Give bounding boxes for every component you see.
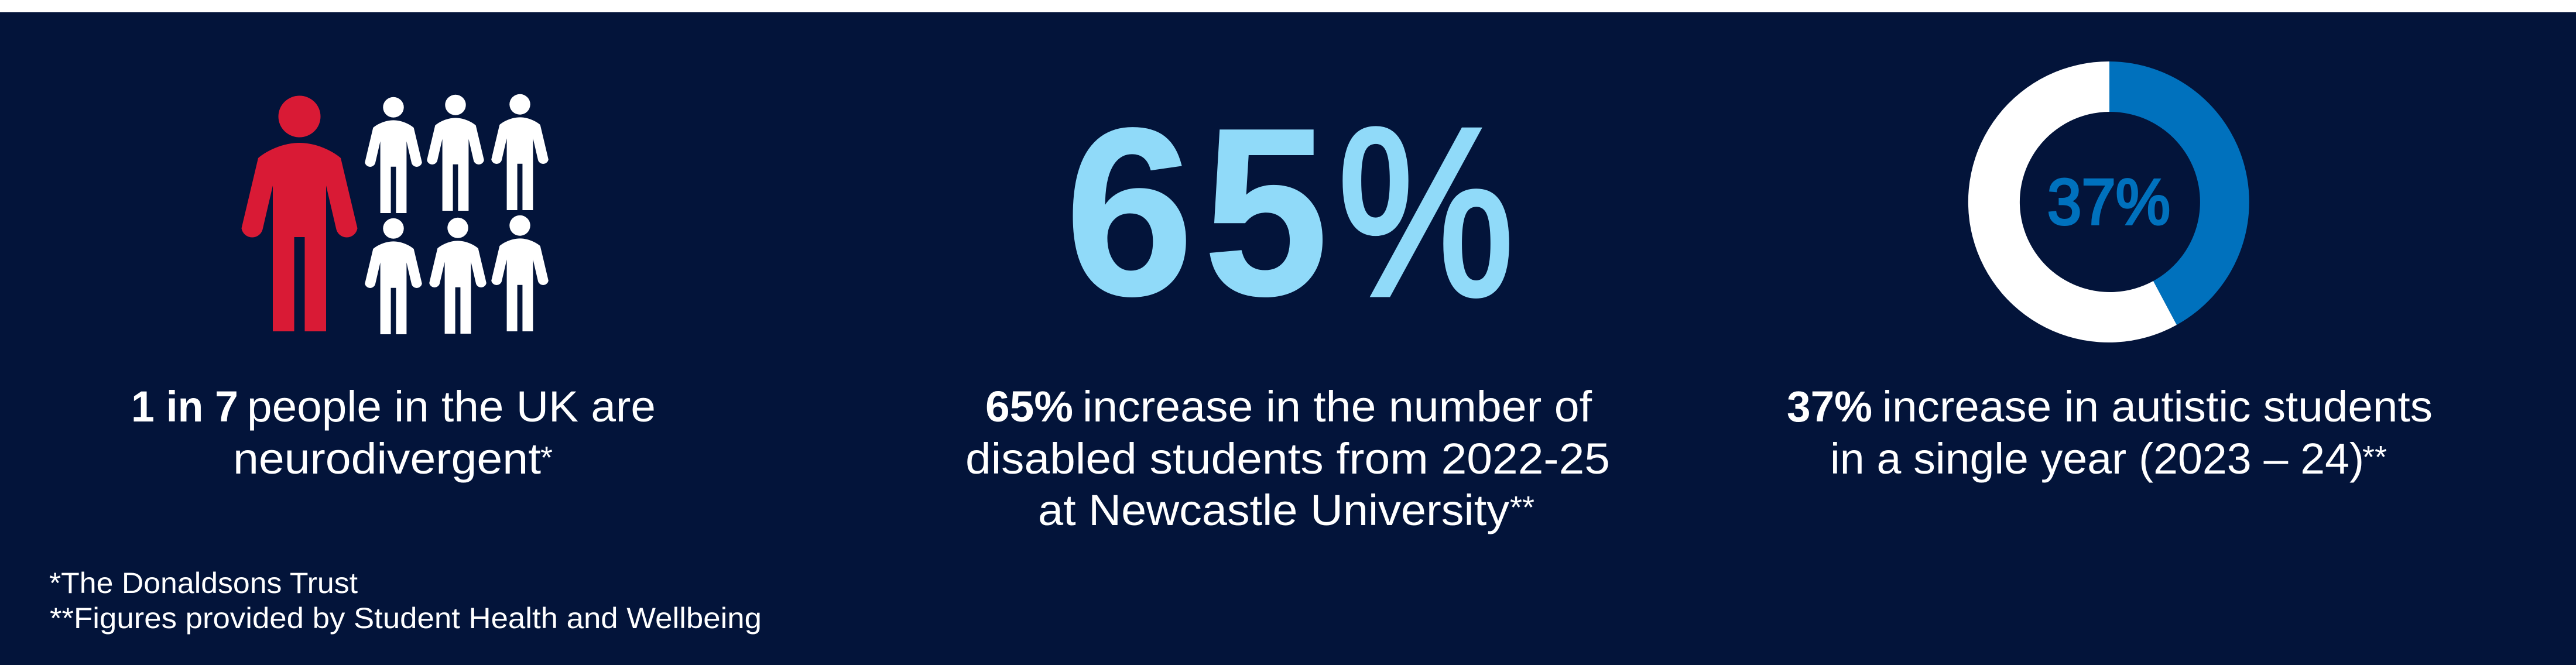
text block: 37% increase: in a single year (2023 – 24) [1830, 434, 2364, 483]
donut label: 37% [2047, 166, 2170, 238]
text block: 37% increase: 37% [1787, 382, 1872, 431]
text block: 1 in 7 people: * [540, 440, 553, 475]
text block: 1 in 7 people: neurodivergent [233, 434, 541, 483]
icon: white person 5 [429, 218, 487, 334]
icon: white person 2 [427, 95, 484, 211]
footnotes [49, 567, 762, 635]
big number: 65%: % [1338, 79, 1514, 345]
text block: 65% increase: at Newcastle University [1038, 486, 1509, 534]
text block: 65% increase: 65% [985, 382, 1073, 431]
text block: 65% increase: ** [1510, 490, 1534, 525]
text block: 37% increase [1787, 382, 2433, 483]
donut chart: 37% [1968, 61, 2249, 342]
text block: 65% increase [965, 382, 1610, 534]
big number: 65%: 6 [1065, 79, 1194, 345]
big number: 65% [1065, 78, 1514, 345]
text block: 65% increase: disabled students from 2022-25 [965, 434, 1610, 483]
icon group: 1 in 7 people [241, 94, 549, 334]
icon: white person 4 [365, 218, 422, 334]
footnotes: *The Donaldsons Trust [49, 567, 358, 599]
icon: white person 1 [365, 97, 422, 213]
icon: red person [241, 96, 357, 331]
footnotes: **Figures provided by Student Health and Wellbeing [50, 602, 762, 635]
icon: white person 3 [491, 94, 549, 210]
icon: white person 6 [491, 215, 549, 331]
text block: 1 in 7 people: people in the UK are [247, 382, 656, 431]
text block: 37% increase: ** [2362, 440, 2387, 475]
donut remainder [1968, 61, 2177, 342]
text block: 1 in 7 people: 1 in 7 [131, 382, 238, 431]
donut segment [2109, 61, 2249, 325]
big number: 65%: 5 [1204, 78, 1328, 345]
text block: 37% increase: increase in autistic students [1882, 382, 2433, 431]
text block: 65% increase: increase in the number of [1083, 382, 1592, 431]
text block: 1 in 7 people [131, 382, 656, 483]
